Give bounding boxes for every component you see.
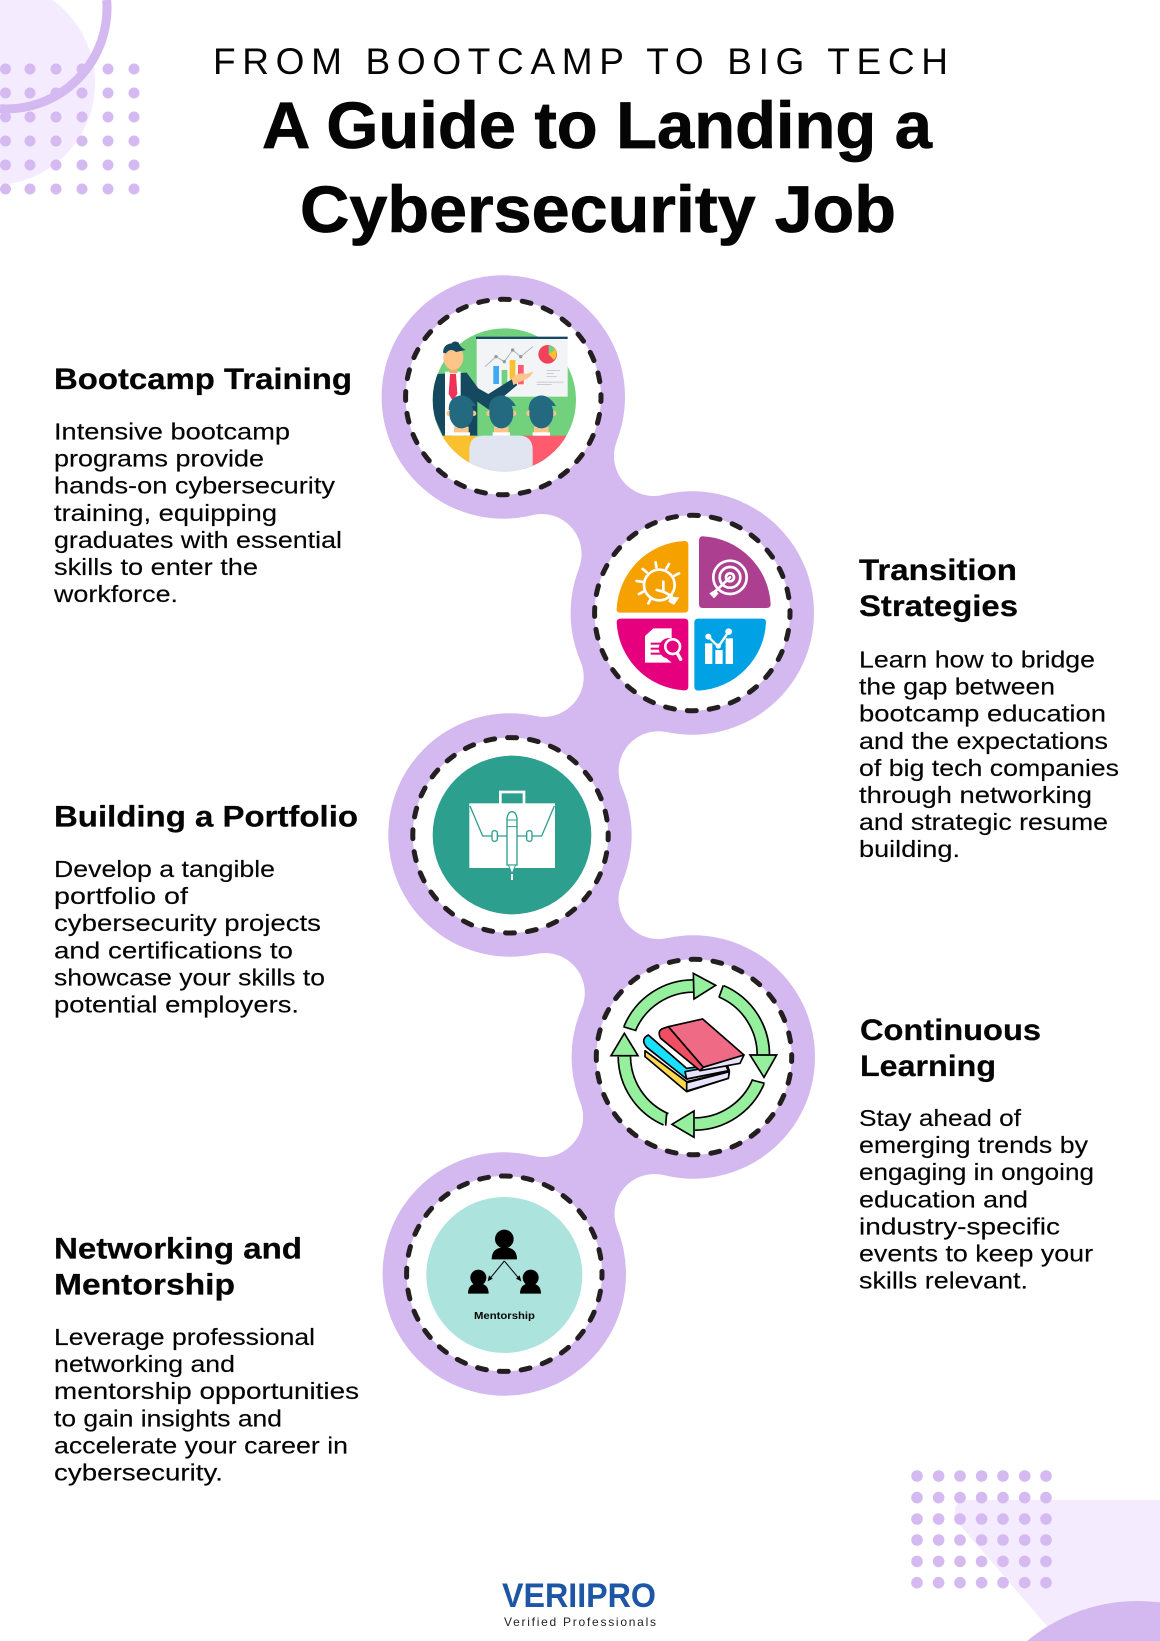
- description: events to keep your: [859, 1240, 1093, 1266]
- description: graduates with essential: [54, 527, 342, 553]
- description: [54, 1324, 359, 1486]
- description: mentorship opportunities: [54, 1378, 359, 1404]
- heading: [860, 1014, 1041, 1083]
- step: Networking and Mentorship: [54, 1232, 359, 1486]
- description: [859, 1105, 1094, 1294]
- description: accelerate your career in: [54, 1432, 348, 1458]
- heading: Strategies: [859, 590, 1018, 623]
- heading: Mentorship: [54, 1268, 235, 1302]
- heading: [859, 554, 1018, 623]
- description: hands-on cybersecurity: [54, 472, 336, 498]
- description: networking and: [54, 1351, 235, 1377]
- bottom-right decoration: [911, 1470, 1160, 1641]
- text: Mentorship badge label: Mentorship: [474, 1311, 535, 1322]
- description: education and: [859, 1186, 1028, 1212]
- heading: Bootcamp Training: [54, 363, 352, 396]
- heading: Building a Portfolio: [54, 800, 358, 834]
- description: showcase your skills to: [54, 964, 325, 990]
- description: potential employers.: [54, 992, 299, 1018]
- icon: portfolio briefcase: [433, 756, 591, 914]
- heading: Learning: [860, 1050, 996, 1083]
- description: skills relevant.: [859, 1268, 1028, 1294]
- step: Continuous Learning: [859, 1014, 1094, 1294]
- heading: Transition: [859, 554, 1017, 587]
- title: Cybersecurity Job: [300, 172, 896, 246]
- description: Leverage professional: [54, 1324, 315, 1350]
- description: and certifications to: [54, 938, 293, 964]
- description: and strategic resume: [859, 809, 1108, 835]
- description: portfolio of: [54, 883, 189, 909]
- description: [53, 418, 342, 607]
- icon: books with cycle arrows: [611, 973, 777, 1137]
- heading: Networking and: [54, 1232, 302, 1266]
- description: Stay ahead of: [859, 1105, 1022, 1131]
- description: training, equipping: [54, 500, 277, 526]
- heading: Continuous: [860, 1014, 1041, 1047]
- description: programs provide: [54, 446, 264, 472]
- description: the gap between: [859, 674, 1055, 700]
- audience heads: [446, 395, 556, 436]
- description: bootcamp education: [859, 700, 1106, 726]
- step: Transition Strategies: [859, 554, 1119, 862]
- description: engaging in ongoing: [859, 1159, 1094, 1185]
- description: cybersecurity.: [54, 1460, 223, 1486]
- step: Building a Portfolio: [54, 800, 358, 1018]
- top-left decoration: [0, 0, 140, 194]
- title: [262, 88, 933, 246]
- description: emerging trends by: [859, 1132, 1089, 1158]
- heading: [54, 1232, 302, 1302]
- subtitle: FROM BOOTCAMP TO BIG TECH: [213, 41, 948, 82]
- title: A Guide to Landing a: [262, 88, 933, 162]
- description: Learn how to bridge: [859, 646, 1095, 672]
- winding purple path: [382, 275, 815, 1396]
- icon: four-quadrant strategy: [617, 536, 771, 691]
- icon: presenter with audience: [430, 327, 577, 473]
- description: through networking: [859, 782, 1092, 808]
- step: Bootcamp Training: [53, 363, 352, 607]
- logo: VERIIPRO: Verified Professionals: [504, 1615, 656, 1629]
- description: workforce.: [53, 581, 178, 607]
- description: Intensive bootcamp: [54, 418, 290, 444]
- description: skills to enter the: [54, 554, 258, 580]
- icon: mentorship: [426, 1197, 582, 1353]
- description: Develop a tangible: [54, 856, 275, 882]
- description: of big tech companies: [859, 755, 1119, 781]
- description: to gain insights and: [54, 1406, 282, 1432]
- description: building.: [859, 836, 960, 862]
- description: [859, 646, 1119, 862]
- description: and the expectations: [859, 728, 1108, 754]
- description: industry-specific: [859, 1214, 1060, 1240]
- logo: VERIIPRO: VERIIPRO: [502, 1577, 656, 1615]
- description: [54, 856, 325, 1018]
- description: cybersecurity projects: [54, 910, 321, 936]
